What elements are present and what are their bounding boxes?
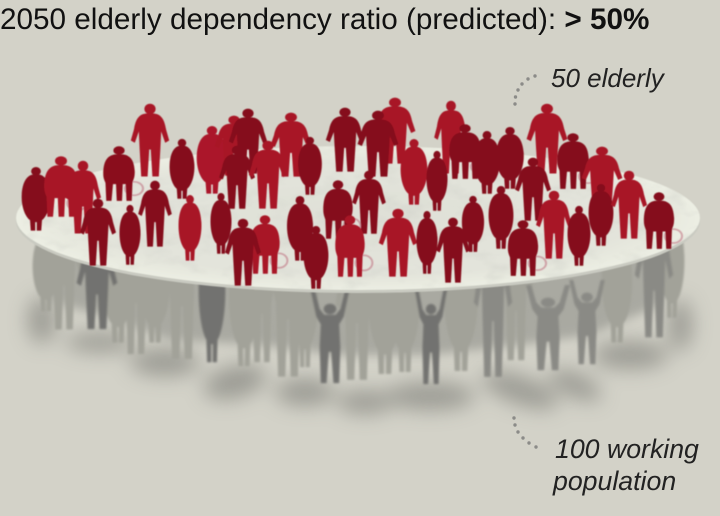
grey mass behind working population bbox=[45, 250, 675, 355]
title: 2050 elderly dependency ratio (predicted): > 50% bbox=[0, 3, 649, 36]
back row bbox=[103, 98, 597, 201]
working population figures bbox=[33, 211, 684, 384]
middle rows bbox=[22, 137, 682, 261]
label: 100 working population: 100 working bbox=[555, 434, 699, 464]
cast shadows of working population bbox=[28, 296, 692, 417]
label: 100 working population: population bbox=[552, 466, 676, 496]
label: 50 elderly: 50 elderly bbox=[551, 63, 666, 93]
elderly figures (red) bbox=[22, 98, 682, 289]
dark grey figures (front row) bbox=[77, 227, 447, 384]
disc platform bbox=[16, 146, 700, 293]
label: 100 working population bbox=[512, 416, 699, 496]
label: 50 elderly bbox=[513, 63, 666, 106]
front rows bbox=[80, 193, 590, 289]
light grey figures (back row) bbox=[33, 211, 684, 380]
mid grey figures (middle row) bbox=[474, 211, 673, 377]
